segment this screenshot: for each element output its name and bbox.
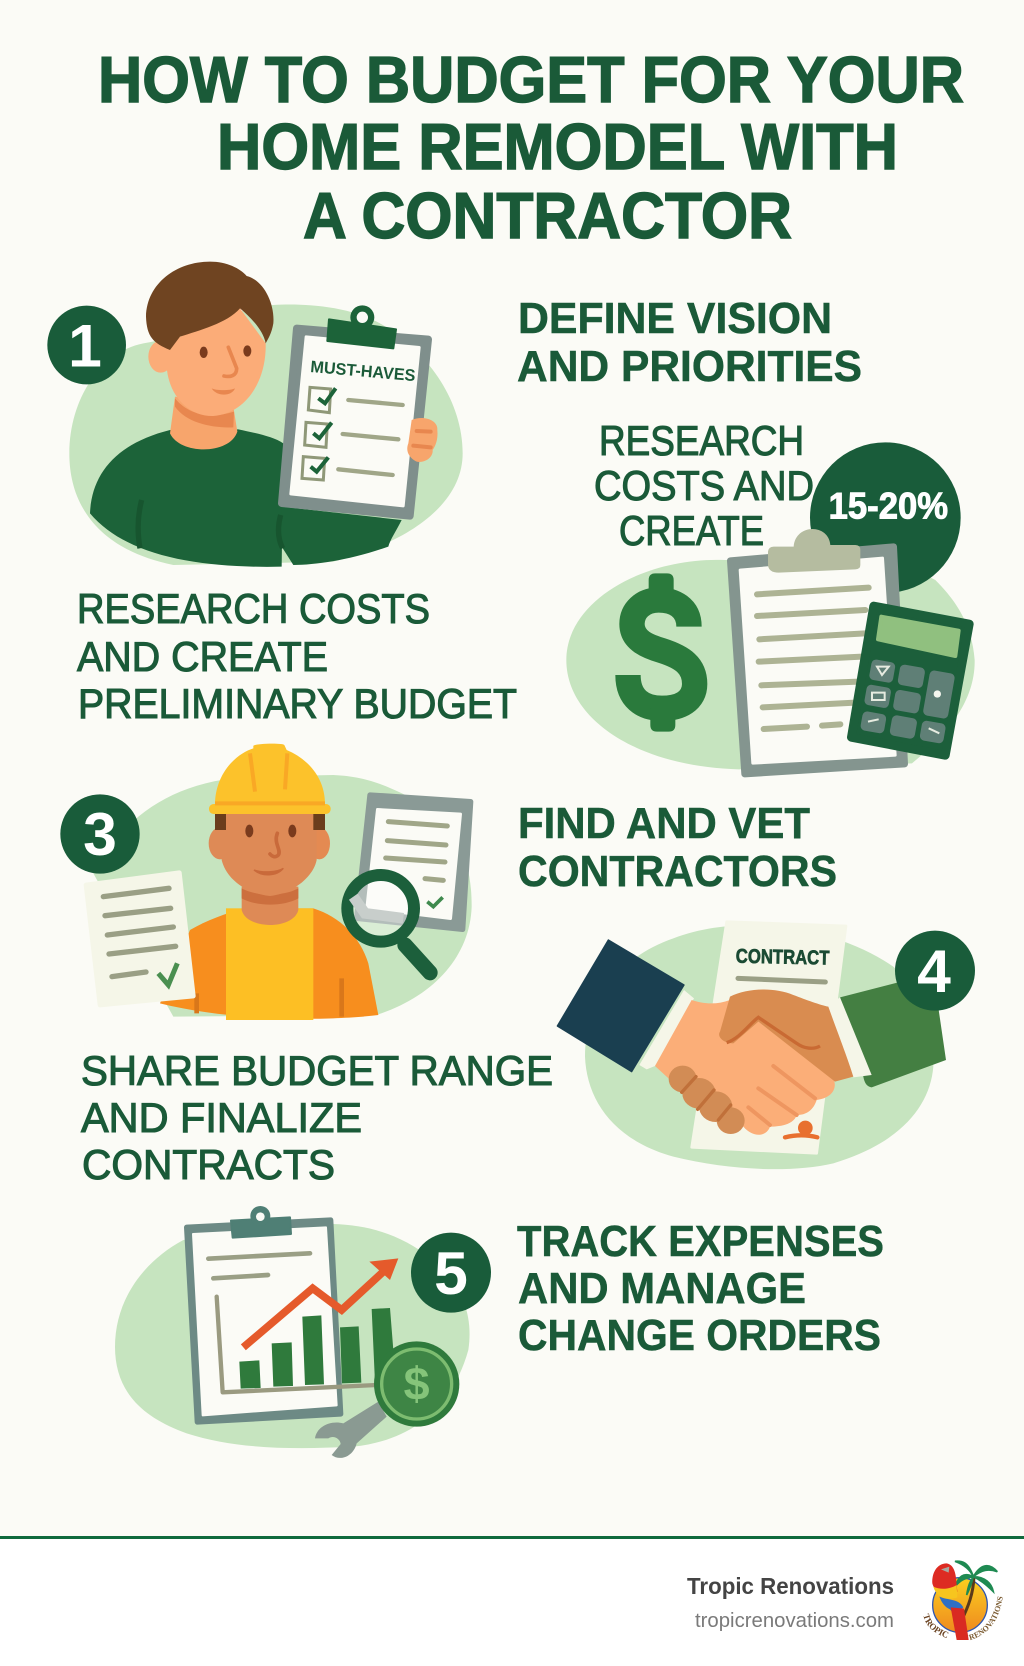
panel: step 3 illustration: [60, 744, 472, 1020]
company name: Tropic Renovations: [687, 1573, 894, 1599]
heading: step 4: AND FINALIZE: [81, 1094, 362, 1141]
heading: step 1: AND PRIORITIES: [517, 342, 862, 391]
contract document: [692, 922, 846, 1153]
footer: [0, 1536, 1024, 1666]
person: [90, 262, 402, 567]
right sleeve: [827, 973, 946, 1087]
heading: step 3: [518, 799, 837, 896]
panel: step 5 illustration: [115, 1206, 491, 1458]
left sleeve: [557, 940, 694, 1072]
panel: step 4 illustration: [557, 922, 975, 1169]
heading: step 2 center: RESEARCH: [599, 417, 804, 464]
worker: [160, 744, 378, 1020]
handshake: [655, 990, 853, 1135]
icon: calculator: [851, 606, 969, 755]
heading: step 5: CHANGE ORDERS: [518, 1311, 881, 1360]
logo: [924, 1560, 1003, 1640]
panel: step 1 illustration: [47, 262, 463, 567]
heading: step 1: [517, 294, 862, 391]
number badge 3: 3: [83, 800, 117, 868]
number badge 4: [895, 931, 975, 1011]
percent badge: [810, 442, 961, 593]
clipboard: must-haves: MUST-HAVES: [310, 357, 416, 385]
heading: step 2 left: AND CREATE: [77, 633, 328, 680]
panel: step 2 illustration: [566, 442, 975, 774]
left document: [86, 873, 193, 1005]
right clipboard: [357, 795, 471, 929]
icon: wrench: [315, 1402, 387, 1458]
clipboard: [730, 529, 905, 774]
heading: step 2 center: CREATE: [619, 507, 764, 554]
title: A CONTRACTOR: [303, 179, 792, 252]
heading: step 4: CONTRACTS: [82, 1141, 335, 1188]
heading: step 4: [81, 1047, 553, 1188]
number badge 4: 4: [917, 937, 951, 1005]
trend arrow: [243, 1258, 398, 1347]
green blob: [585, 925, 933, 1169]
number badge 1: 1: [68, 312, 102, 380]
number badge 3: [60, 794, 140, 874]
heading: step 4: SHARE BUDGET RANGE: [81, 1047, 553, 1094]
heading: step 2 left: RESEARCH COSTS: [77, 585, 430, 632]
logo: TROPIC: [924, 1613, 948, 1638]
green blob: [566, 560, 975, 769]
green blob: [69, 305, 463, 565]
heading: step 3: CONTRACTORS: [518, 847, 837, 896]
clipboard with chart: [187, 1206, 393, 1422]
green blob: [93, 775, 472, 1017]
number badge 5: [411, 1233, 491, 1313]
icon: coin: [374, 1341, 459, 1427]
heading: step 2 center: [594, 417, 814, 554]
heading: step 2 center: COSTS AND: [594, 462, 814, 509]
heading: step 2 left: [77, 585, 517, 727]
website: tropicrenovations.com: [695, 1610, 894, 1632]
number badge 5: 5: [434, 1239, 468, 1307]
heading: step 1: DEFINE VISION: [518, 294, 832, 343]
icon: dollar sign: [628, 573, 695, 732]
icon: coin: $: [404, 1357, 430, 1409]
logo: RENOVATIONS: [968, 1596, 1003, 1640]
heading: step 5: AND MANAGE: [518, 1264, 806, 1313]
green blob: [115, 1224, 470, 1448]
hand holding clipboard: [407, 418, 438, 462]
icon: magnifying glass: [347, 875, 430, 973]
clipboard: must-haves: [282, 305, 428, 516]
contract document: CONTRACT: [736, 946, 830, 970]
heading: step 2 left: PRELIMINARY BUDGET: [78, 680, 517, 727]
title: [98, 43, 964, 252]
number badge 1: [47, 306, 126, 384]
title: HOW TO BUDGET FOR YOUR: [98, 43, 964, 116]
heading: step 5: TRACK EXPENSES: [517, 1217, 884, 1266]
title: HOME REMODEL WITH: [217, 110, 898, 183]
heading: step 5: [517, 1217, 884, 1360]
heading: step 3: FIND AND VET: [518, 799, 810, 848]
percent badge: 15-20%: [829, 485, 948, 526]
